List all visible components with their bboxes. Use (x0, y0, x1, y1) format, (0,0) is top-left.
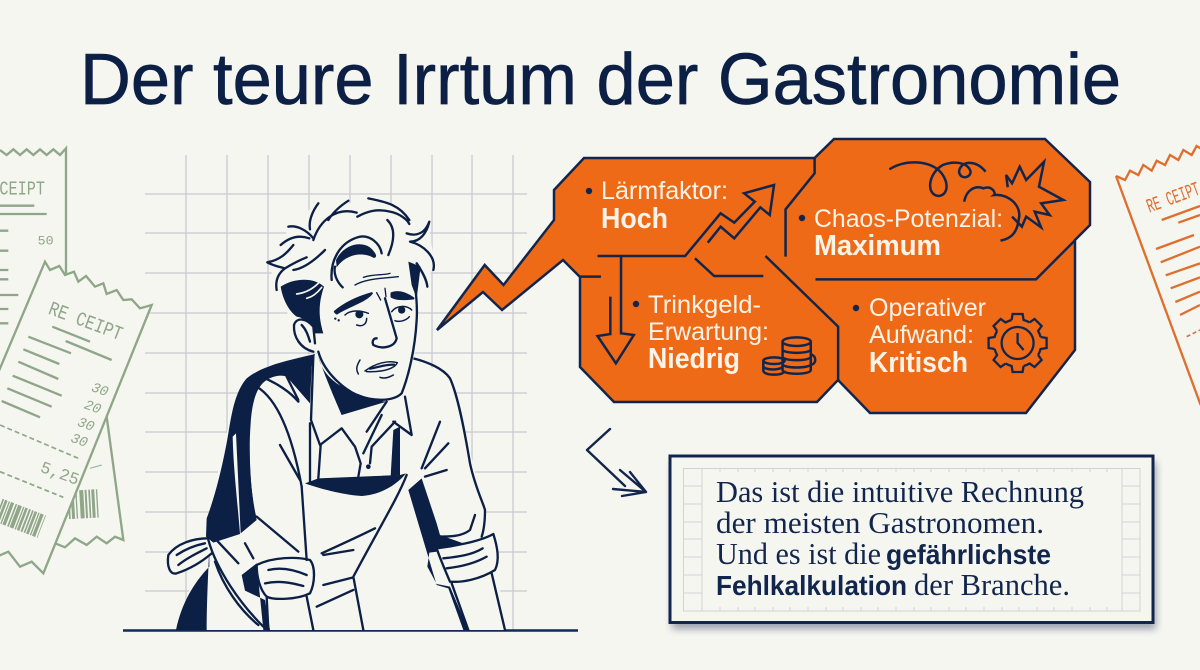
item: Operativer Aufwand (853, 294, 986, 379)
shirt collar and placket (311, 357, 412, 477)
item: Chaos-Potenzial (799, 205, 1003, 262)
back receipt (0, 148, 66, 323)
front receipt: 30 (75, 415, 96, 436)
item: Trinkgeld-Erwartung (633, 291, 769, 375)
front receipt (0, 262, 152, 573)
callout inner grid (683, 468, 1140, 611)
side hair shadow (281, 280, 324, 333)
apron tail shadow (176, 547, 209, 630)
item: Operativer Aufwand: Operativer (869, 294, 986, 322)
item: Trinkgeld-Erwartung: Erwartung: (648, 318, 769, 346)
callout text: gefährlichste (886, 539, 1051, 570)
front receipt: 5,25 (37, 459, 81, 491)
head and hair base (268, 200, 435, 400)
hair right shadow (408, 262, 421, 298)
neck shadow (318, 357, 387, 415)
callout frame (670, 456, 1153, 622)
left receipts, green (0, 148, 152, 573)
background grid (145, 155, 527, 630)
item: Lärmfaktor: Hoch (601, 203, 668, 235)
front receipt: 30 (89, 380, 110, 401)
callout shadow (672, 462, 1156, 629)
callout text: Und es ist die (716, 536, 881, 571)
title: Der teure Irrtum der Gastronomie (80, 40, 1121, 120)
callout text: der Branche. (914, 567, 1070, 602)
icon: gear with clock (989, 314, 1047, 372)
callout text: Das ist die intuitive Rechnung (716, 474, 1084, 509)
back shadow (206, 354, 315, 543)
bubble shape (437, 139, 1090, 413)
hair dark forelock (336, 244, 376, 267)
item: Trinkgeld-Erwartung: Niedrig (648, 343, 740, 375)
icon: chaos scribble (889, 162, 986, 196)
icon: explosion star (1006, 162, 1063, 227)
item: Lärmfaktor (586, 177, 728, 235)
shirt left details (248, 377, 302, 517)
item: Chaos-Potenzial: Maximum (814, 230, 941, 262)
apron skirt lines (208, 517, 298, 627)
apron (302, 423, 407, 630)
icon: falling arrow (598, 256, 634, 363)
apron bow (168, 538, 212, 574)
front receipt: RE CEIPT (45, 298, 125, 347)
front receipt: 30 (68, 431, 90, 452)
character: worried restaurateur (168, 198, 505, 630)
arrow to callout (587, 429, 646, 496)
floor line (123, 629, 578, 632)
callout text: der meisten Gastronomen. (716, 505, 1044, 540)
inner dividers and arrows (580, 158, 1075, 380)
item: Operativer Aufwand: Aufwand: (869, 321, 974, 349)
item: Lärmfaktor: Lärmfaktor: (601, 177, 728, 205)
face details (334, 273, 413, 378)
apron right strap (391, 427, 400, 476)
lower tilted receipt (50, 417, 123, 547)
hair highlights (297, 281, 322, 298)
right arm (408, 358, 505, 630)
right receipt, orange (1116, 146, 1200, 405)
speech bubble with jagged tail (437, 139, 1090, 413)
icon: rising zigzag arrow (598, 185, 774, 256)
back receipt: 50 (38, 234, 54, 249)
hair strokes (267, 198, 434, 290)
item: Operativer Aufwand: Kritisch (869, 347, 968, 379)
icon: coin stacks (763, 337, 815, 375)
left cuff (242, 558, 314, 630)
front receipt: 20 (82, 398, 103, 418)
icon: chaos cloud (964, 187, 1019, 241)
item: Chaos-Potenzial: Chaos-Potenzial: (814, 205, 1003, 233)
body silhouette (177, 353, 505, 630)
back receipt: CEIPT (0, 178, 45, 200)
callout text (716, 474, 1084, 602)
callout text: Fehlkalkulation (716, 570, 907, 601)
callout box (670, 456, 1156, 629)
ear (294, 320, 315, 352)
item: Trinkgeld-Erwartung: Trinkgeld- (648, 291, 761, 319)
face outline (318, 285, 417, 400)
